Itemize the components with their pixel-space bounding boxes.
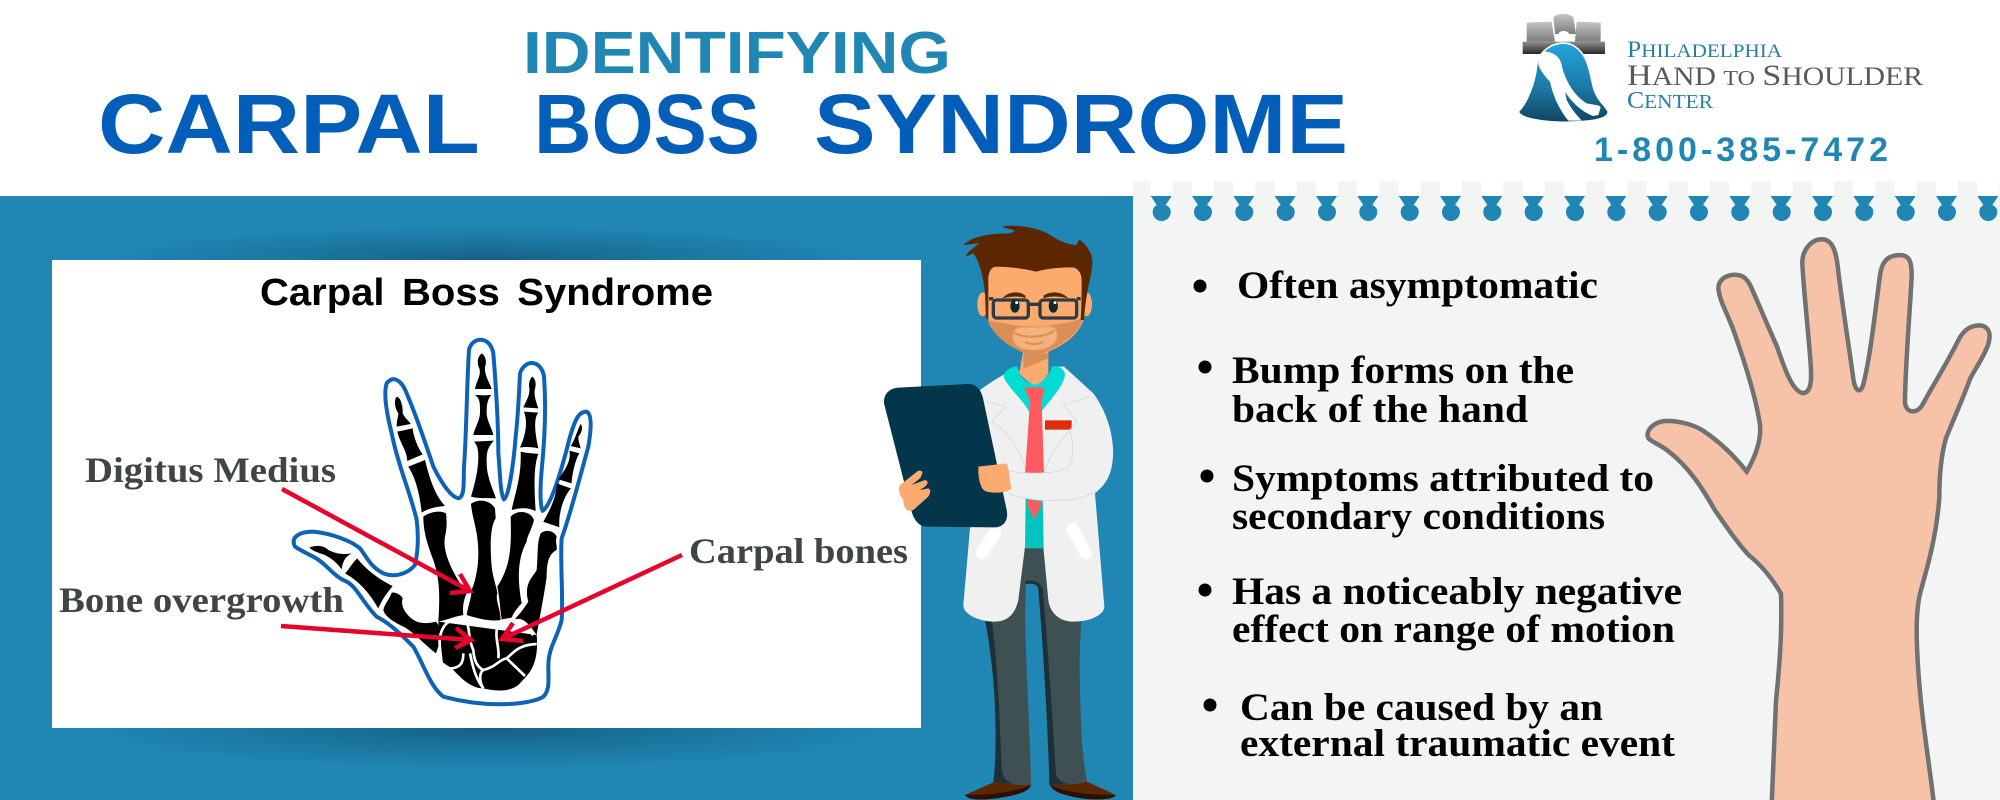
label: Carpal bones: Carpal bones [689,531,908,571]
logo: Philadelphia Hand to Shoulder Center [1518,14,1924,122]
eyes [1010,299,1020,313]
logo text: Philadelphia: PHILADELPHIA [1627,37,1782,62]
shirt [1025,497,1044,548]
hand outline [294,340,591,704]
bullet 5: external traumatic event [1240,722,1675,765]
glasses [989,299,1081,318]
title: carpal boss syndrome: CARPAL [98,77,478,171]
title: carpal boss syndrome: BOSS [534,77,760,171]
panel: blue background [0,196,1133,800]
icon: liberty bell logo [1518,14,1608,122]
bullet 4: effect on range of motion [1232,608,1675,651]
bullet 2: Bump forms on the [1232,349,1574,392]
neck [1019,350,1048,385]
coat lines [987,397,1095,501]
label: Bone overgrowth: Bone overgrowth [59,580,344,620]
legs and shoes [965,510,1116,800]
bullet 2: back of the hand [1232,388,1528,431]
ears [977,292,988,316]
bullet 3: Symptoms attributed to [1232,457,1654,500]
coat sleeve [1008,467,1112,501]
hand skeleton diagram [294,340,591,704]
bullet 4 [1198,570,1682,651]
illustration: raised hand [1648,239,1990,800]
logo text: Hand to Shoulder: HAND TO SHOULDER [1627,59,1924,92]
collar [1004,366,1065,413]
bullet 3: secondary conditions [1232,495,1605,538]
bones [309,353,582,691]
card heading: Carpal Boss Syndrome [260,272,713,314]
panel: white diagram card [52,260,921,728]
clipboard [884,384,1007,527]
face [987,267,1085,356]
hands [978,463,1012,493]
doctor illustration [884,226,1116,800]
bullet list [1194,264,1682,765]
name tag [1045,420,1072,430]
coat pockets [982,529,1086,553]
arrow: Bone overgrowth [281,626,471,648]
label: Digitus Medius: Digitus Medius [85,450,336,490]
bullet 5: Can be caused by an [1240,686,1603,729]
arrow: Digitus Medius [282,489,470,593]
bullet 5 [1204,686,1675,765]
tie [1024,387,1044,473]
upper body and head [884,226,1113,622]
carpal joint lines [440,619,537,688]
beard shading [988,317,1084,356]
hair [963,226,1092,320]
bullet 4: Has a noticeably negative [1232,570,1682,613]
title: carpal boss syndrome: SYNDROME [814,77,1348,171]
panel: notepaper [1133,181,2000,800]
bullet 3 [1200,457,1654,538]
lab coat [963,367,1113,622]
eyebrows [1004,293,1067,297]
bullet 1: Often asymptomatic [1237,264,1598,307]
phone number: 1-800-385-7472 [1594,131,1888,169]
title: identifying: IDENTIFYING [523,20,951,86]
arrow: Carpal bones [502,555,682,641]
logo text: Center: CENTER [1627,88,1714,114]
panel shadows [90,226,890,769]
bullet 2 [1198,349,1574,431]
